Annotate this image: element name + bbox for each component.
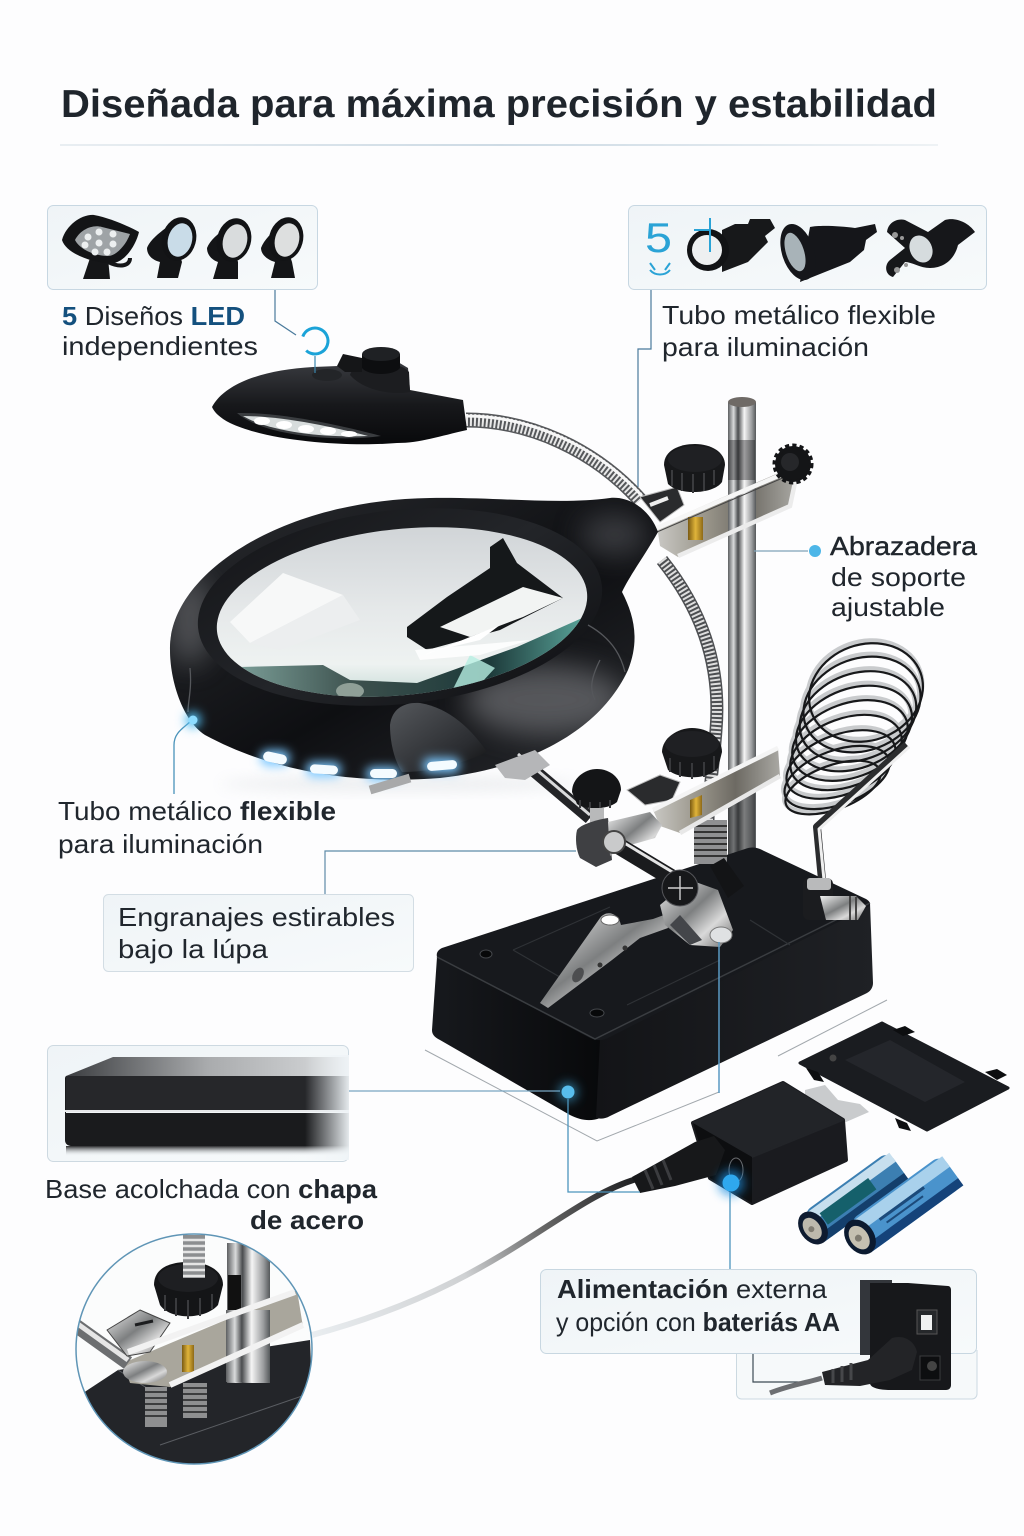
panel: Engranajes estirables [104, 894, 414, 972]
label: Engranajes estirables: Engranajes estirables [118, 902, 395, 932]
product: threaded column and lower knob [694, 820, 744, 898]
panel: Alimentación externa [540, 1270, 976, 1354]
label: de soporte: de soporte [831, 562, 966, 592]
callout: LED ring connector [174, 712, 201, 794]
label: y opción con baterías AA: y opción con bateriás AA [556, 1307, 840, 1337]
photo: power socket device [770, 1280, 951, 1393]
callout: power connector [718, 1170, 744, 1269]
panel: 5 LED designs [48, 206, 318, 290]
icon: lens lamp 3 [207, 214, 256, 279]
icon: lens lamp 4 [261, 213, 308, 278]
product: black base [432, 848, 873, 1120]
product: vertical steel rod [728, 397, 756, 895]
product: magnifying glass [168, 489, 658, 791]
callout: gears connector [325, 851, 576, 894]
label: Abrazadera: Abrazadera [830, 531, 978, 561]
product: desk lamp head [212, 347, 467, 444]
numeral 5: 5 [645, 214, 672, 261]
panel: power socket photo lower box [736, 1350, 977, 1399]
icon: LED array lamp [62, 215, 139, 279]
label: ajustable: ajustable [831, 592, 945, 622]
title: Diseñada para máxima precisión y estabilidad [61, 83, 937, 126]
callout: base connector [349, 1082, 640, 1192]
magnifier body shell [168, 498, 658, 780]
label: Tubo metálico flexible (ring): Tubo metálico flexible [58, 796, 336, 826]
product: battery compartment cover [800, 1023, 1008, 1131]
label: para iluminación (ring): para iluminación [58, 829, 263, 859]
label: Base acolchada con chapa: Base acolchada con chapa [45, 1174, 378, 1204]
label: de acero: de acero [250, 1205, 364, 1235]
label: independientes: independientes [62, 331, 258, 361]
lens glass [216, 527, 588, 697]
icon: lens lamp 2 [147, 213, 201, 278]
product: AA batteries [792, 1151, 963, 1261]
product: gooseneck to lamp [466, 416, 642, 500]
panel: flexible tube heads [628, 206, 986, 290]
icon: spot head two [774, 219, 877, 285]
lens rim [188, 489, 612, 725]
callout: tube connector [638, 290, 651, 487]
callout: clamp connector dot [754, 545, 821, 557]
product: lower gooseneck [662, 560, 717, 820]
icon: spot head one [687, 218, 775, 272]
product: soldering coil holder [775, 625, 937, 920]
photo: cushioned base block [65, 1055, 349, 1160]
pivot block [576, 818, 612, 867]
label: 5 Diseños LED: 5 Diseños LED [62, 301, 245, 331]
label: Tubo metálico flexible: Tubo metálico flexible [662, 300, 936, 330]
icon: rotate arrows [650, 263, 670, 274]
product: upper adjustable clamp [640, 444, 811, 557]
product: power adapter [632, 1083, 869, 1203]
LED row [260, 750, 460, 781]
icon: spot head three [886, 219, 975, 277]
swivel joint [660, 880, 733, 947]
decorative stage lines [425, 1000, 887, 1141]
label: bajo la lúpa: bajo la lúpa [118, 934, 269, 964]
label: Alimentación externa: Alimentación externa [557, 1274, 828, 1304]
callout: dotted joint line [718, 942, 720, 1093]
product: power cable [312, 1178, 640, 1335]
callout: LED designs connector [275, 290, 332, 373]
panel: base close-up [48, 1046, 349, 1162]
inset: clamp detail circle [70, 1230, 320, 1470]
label: para iluminación: para iluminación [662, 332, 869, 362]
product: lower clamp and helping hand [370, 728, 780, 1008]
lower grip bump [390, 703, 487, 772]
alligator clip [540, 913, 668, 1008]
